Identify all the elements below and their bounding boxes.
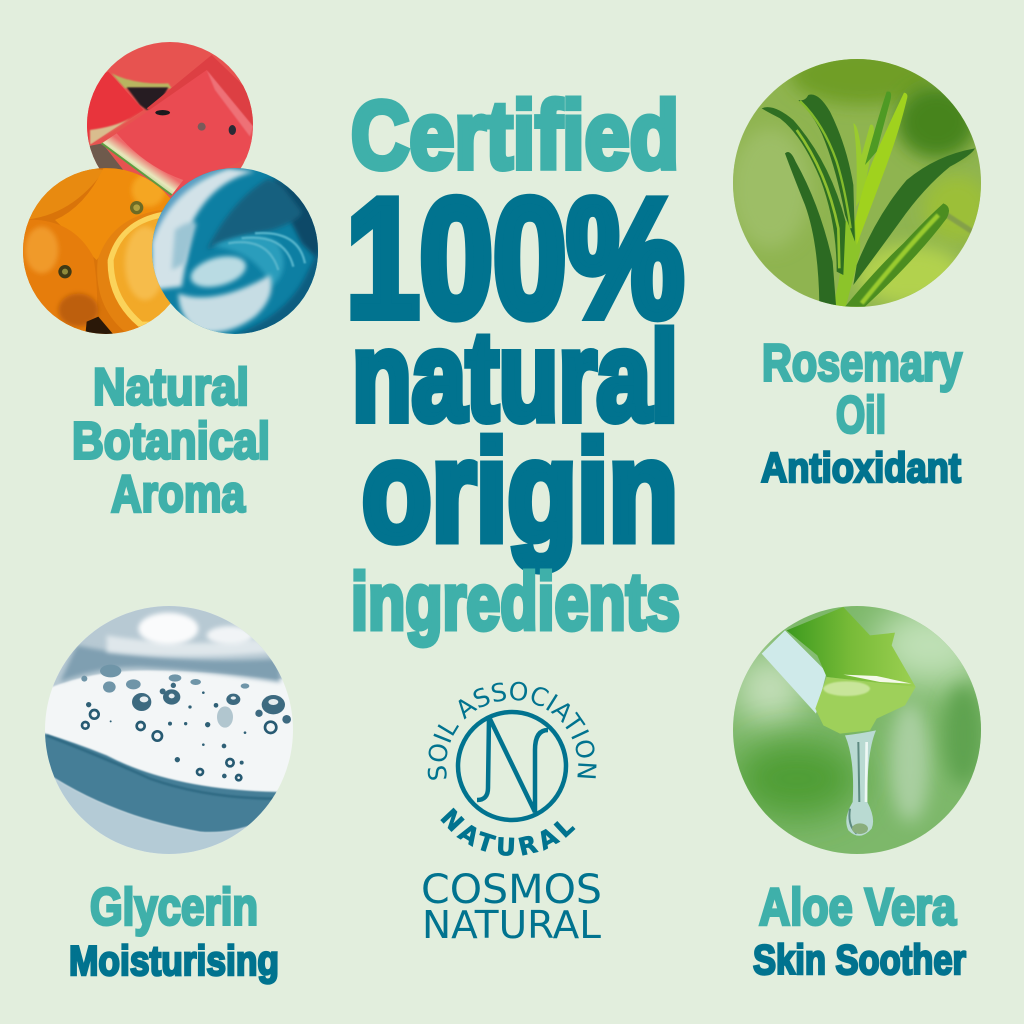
photo: aloe vera: [730, 602, 987, 857]
logo arc text: SOIL ASSOCIATION: SOIL ASSOCIATION: [428, 682, 596, 780]
panel: natural botanical aroma: [18, 37, 322, 524]
panel: rosemary oil: [730, 45, 990, 491]
label: Rosemary Oil: Rosemary: [762, 334, 962, 392]
label: Natural Botanical Aroma: Aroma: [111, 466, 246, 524]
label: Rosemary Oil: [762, 334, 962, 444]
logo wordmark: NATURAL: NATURAL: [422, 903, 601, 947]
label: Glycerin: Glycerin: [90, 878, 258, 936]
photo: glycerin gel: [40, 602, 295, 857]
photo: ocean wave: [150, 167, 322, 337]
title line: origin: origin: [362, 412, 678, 571]
main title: [346, 82, 684, 646]
label: Rosemary Oil: Oil: [836, 386, 886, 444]
panel: glycerin: [40, 602, 295, 984]
photo: watermelon: [87, 42, 253, 198]
logo ring and N mark: [458, 712, 566, 820]
label: Natural Botanical Aroma: Botanical: [72, 412, 270, 470]
title line: ingredients: ingredients: [351, 557, 680, 646]
label: Natural Botanical Aroma: Natural: [93, 358, 249, 416]
title line: 100%: 100%: [346, 164, 684, 352]
photo: oranges: [23, 168, 170, 334]
title line: Certified: Certified: [351, 82, 679, 189]
logo wordmark: COSMOS: COSMOS: [421, 867, 602, 913]
label: Antioxidant: Antioxidant: [761, 444, 961, 491]
label: Aloe Vera: Aloe Vera: [759, 878, 957, 936]
logo: Soil Association Cosmos Natural: [421, 682, 602, 947]
label: Skin Soother: Skin Soother: [753, 936, 966, 983]
logo arc text: NATURAL: NATURAL: [440, 808, 576, 856]
panel: aloe vera: [730, 602, 987, 983]
title line: natural: natural: [352, 306, 678, 447]
label: Moisturising: Moisturising: [69, 937, 279, 984]
label: Natural Botanical Aroma: [72, 358, 270, 524]
photo: rosemary: [733, 59, 981, 307]
